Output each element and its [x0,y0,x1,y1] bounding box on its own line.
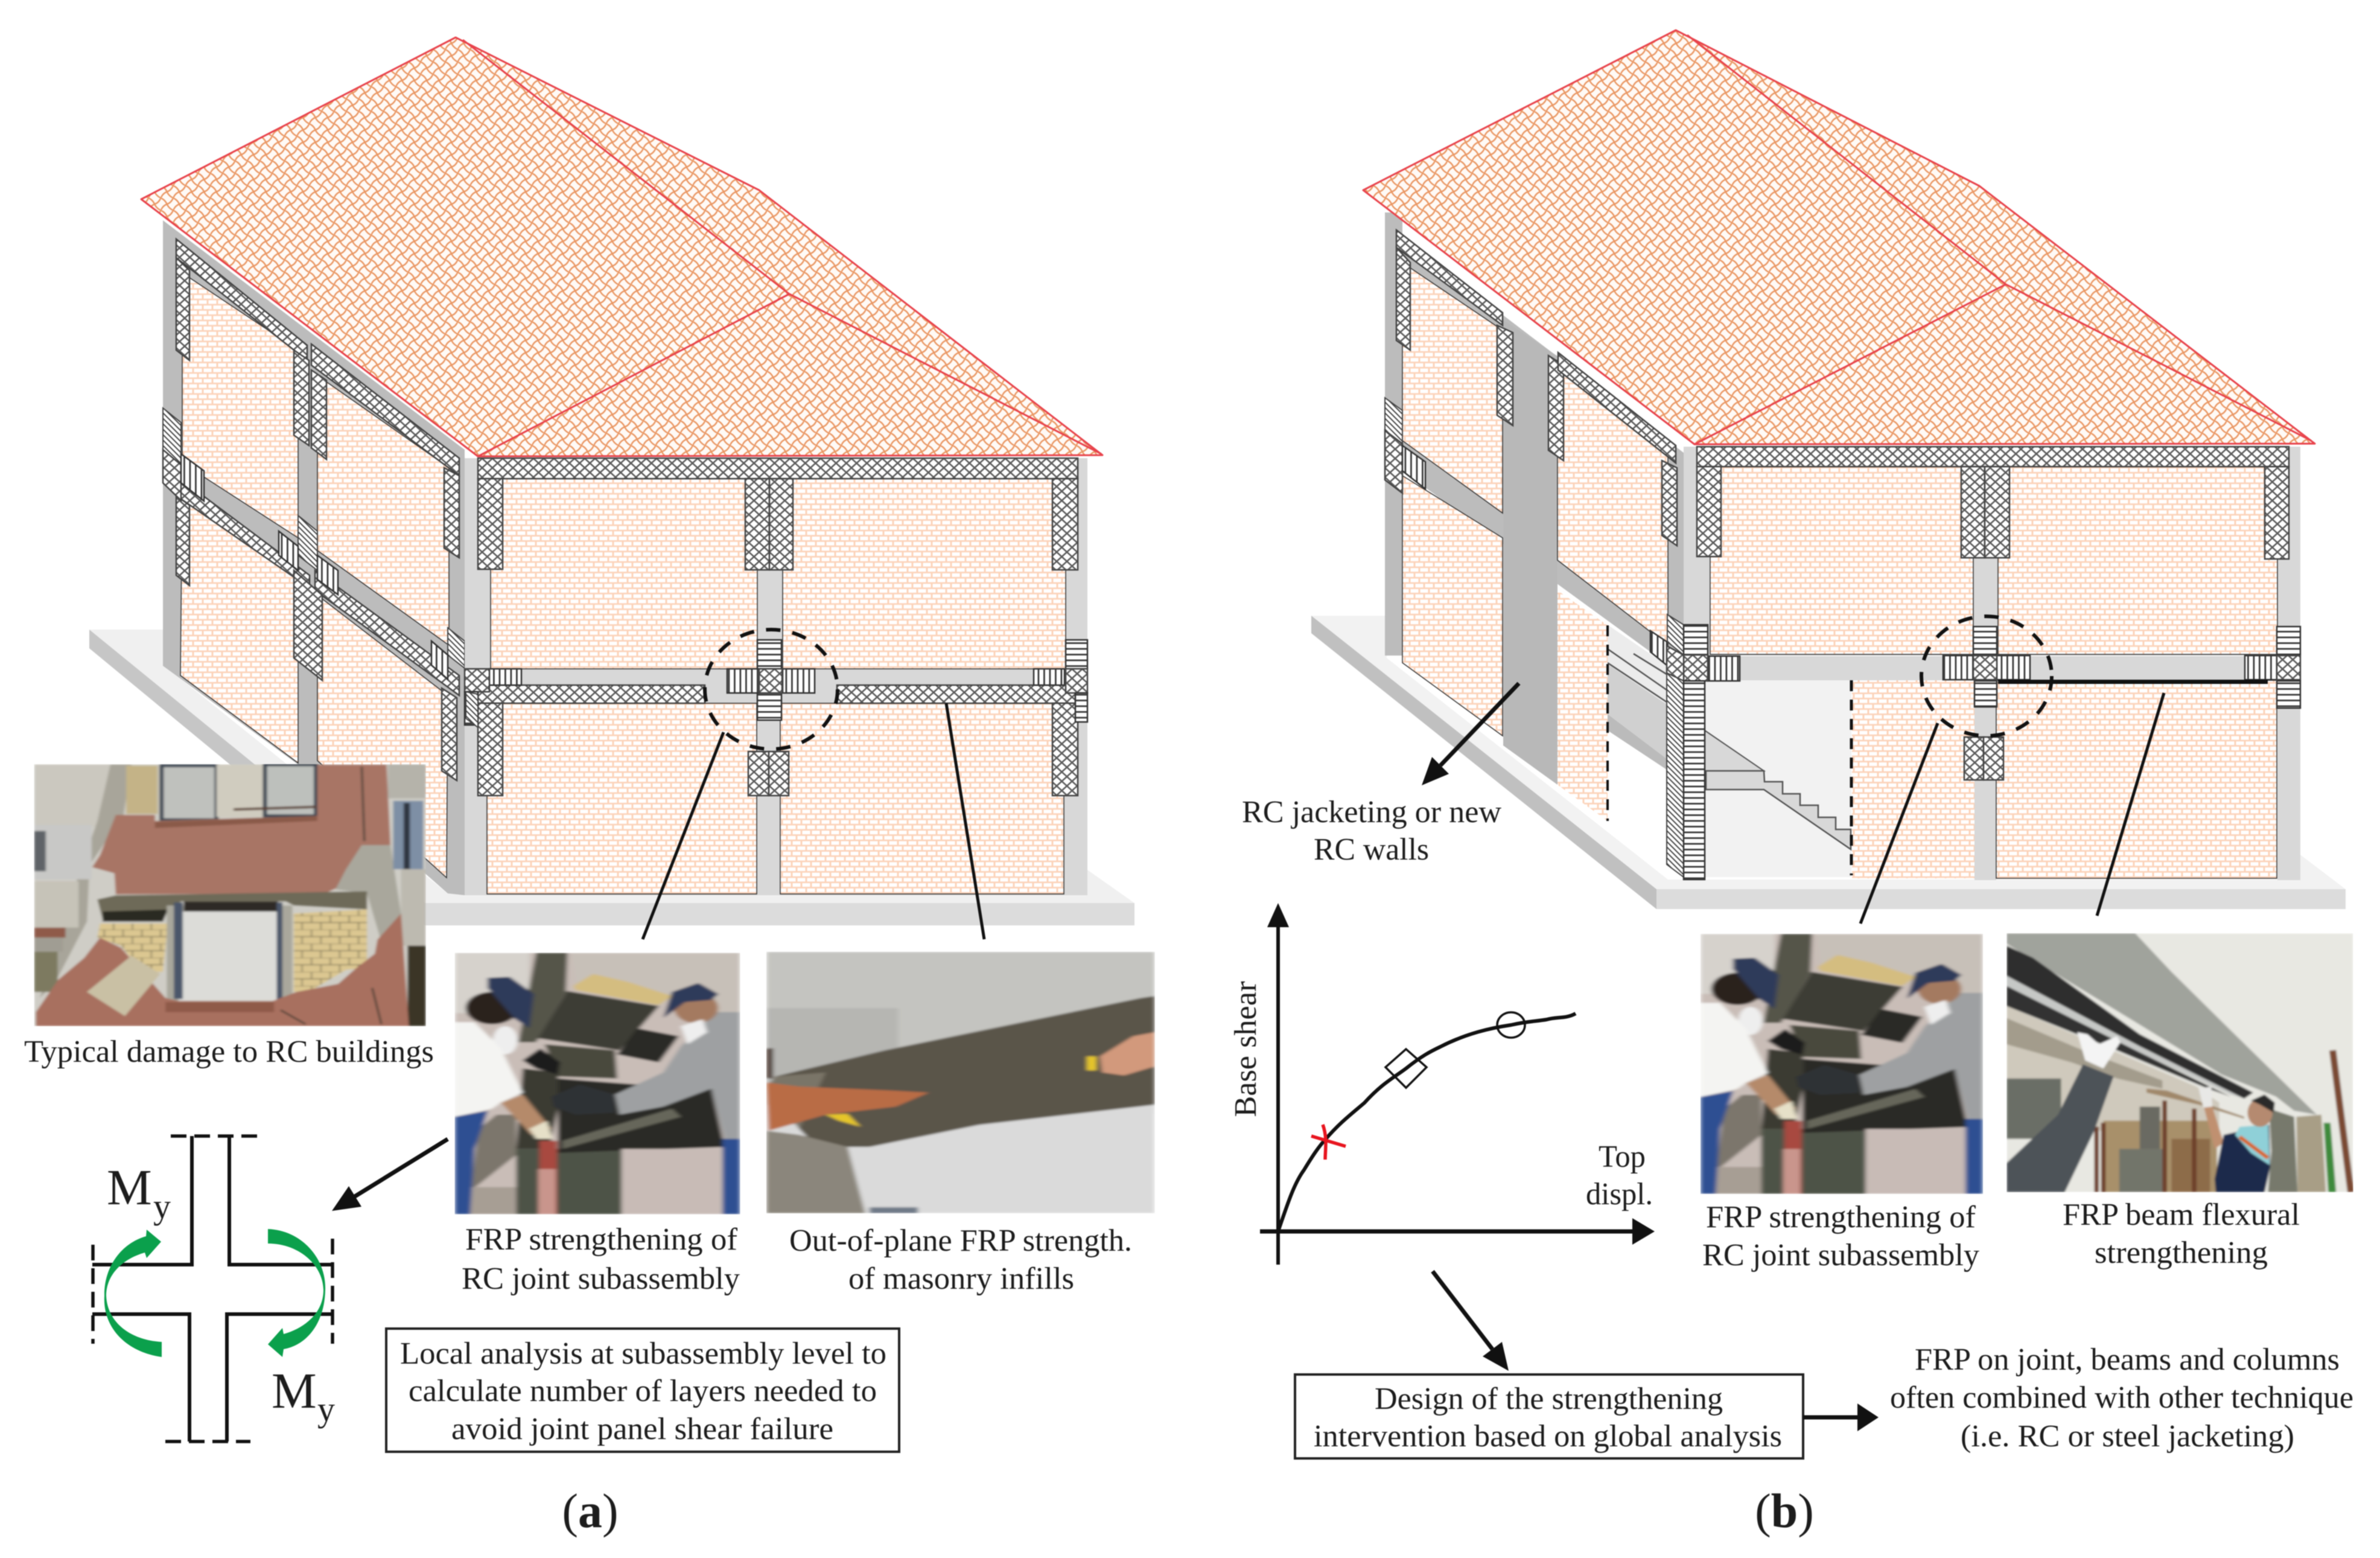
callout: design of intervention [1295,1374,1803,1458]
leader to beam photo [2097,693,2164,916]
dashed joint ellipse b [1921,616,2052,736]
photo: typical damage [34,764,426,1026]
text: FRP on joint, beams and columns: (i.e. RC or steel jacketing) [1961,1419,2294,1454]
photo: FRP beam flexural strengthening [2006,933,2353,1192]
panel a: house with FRP joint strengthening [89,37,1134,939]
caption: infill strengthening: of masonry infills [848,1262,1074,1296]
arrow: design box to FRP text [1803,1403,1879,1431]
leader to joint photo b [1860,723,1938,924]
caption: joint strengthening b [1702,1200,1979,1272]
FRP wraps b [1667,447,2300,880]
arrow: chart to design box [1433,1271,1509,1371]
arrow: RC wall to label [1422,683,1519,785]
x axis [1260,1218,1655,1245]
photo: out-of-plane FRP on infill [766,952,1155,1213]
dashed joint ellipse [705,630,838,749]
floor slab [89,630,1134,925]
callout: local analysis: calculate number of layers needed to [409,1374,877,1408]
label: RC jacketing: RC walls [1314,832,1429,867]
brick infills b [1710,467,2277,878]
caption: joint strengthening b: RC joint subassembly [1702,1238,1979,1272]
label b: (b) [1755,1485,1814,1538]
opening with stairs [1705,680,1851,877]
caption: joint strengthening a: RC joint subassembly [462,1262,740,1296]
FRP beams and column wraps [465,458,1087,796]
diamond marker [1386,1049,1427,1088]
x axis label: displ. [1586,1177,1653,1212]
label: RC jacketing [1242,795,1501,867]
leader to joint photo [643,732,724,939]
side elevation wall b [1385,212,1684,821]
text: FRP on joint, beams and columns: often combined with other technique [1890,1381,2353,1415]
circle marker [1497,1012,1525,1038]
arrow: joint photo to subassembly diagram [332,1139,448,1211]
callout: design of intervention: Design of the strengthening [1375,1382,1723,1416]
roof [141,37,1102,456]
callout: local analysis [386,1329,899,1452]
moment arrow left [104,1230,162,1357]
caption: joint strengthening b: FRP strengthening of [1706,1200,1976,1234]
floor slab b [1311,616,2346,909]
text: FRP on joint, beams and columns [1890,1342,2353,1454]
new RC wall [1503,320,1558,785]
label: RC jacketing: RC jacketing or new [1242,795,1501,829]
x axis label: Top [1599,1140,1646,1174]
moment label upper: M [107,1160,152,1216]
moment label lower: M [272,1363,317,1419]
chart: pushover curve [1229,903,1655,1265]
x axis label [1586,1140,1653,1212]
roof b [1363,30,2315,444]
y axis label: Base shear [1229,982,1263,1117]
caption: beam strengthening [2063,1198,2300,1270]
front elevation frame [465,458,1087,895]
brick infills [487,479,1066,894]
moment label lower: y [317,1390,335,1429]
moment label upper: y [153,1187,171,1226]
callout: local analysis: Local analysis at subassembly level to [400,1336,886,1371]
photo: FRP joint strengthening b [1701,934,1983,1194]
caption: beam strengthening: FRP beam flexural [2063,1198,2300,1232]
y axis [1267,903,1289,1265]
diagram: joint subassembly with moments [92,1136,335,1441]
caption: typical damage: Typical damage to RC buildings [24,1035,434,1069]
leader to infill photo [946,703,984,939]
caption: infill strengthening: Out-of-plane FRP strength. [789,1224,1132,1258]
side elevation wall [163,220,465,895]
panel b: house with global strengthening [1311,30,2346,924]
callout: local analysis: avoid joint panel shear failure [451,1412,833,1446]
caption: joint strengthening a: FRP strengthening of [465,1222,738,1257]
caption: infill strengthening [789,1224,1132,1296]
front elevation frame b [1684,447,2300,880]
capacity curve [1278,1014,1576,1231]
subassembly outline [92,1136,332,1441]
photo: FRP joint strengthening a [455,953,740,1215]
section cut dashes [93,1136,332,1441]
text: FRP on joint, beams and columns: FRP on joint, beams and columns [1915,1342,2340,1377]
label a: (a) [562,1485,619,1538]
caption: joint strengthening a [462,1222,740,1296]
black FRP beam plate [1998,680,2268,684]
callout: design of intervention: intervention based on global analysis [1314,1419,1782,1454]
moment arrow right [268,1229,325,1357]
caption: beam strengthening: strengthening [2095,1236,2268,1270]
red cross marker [1311,1125,1346,1160]
